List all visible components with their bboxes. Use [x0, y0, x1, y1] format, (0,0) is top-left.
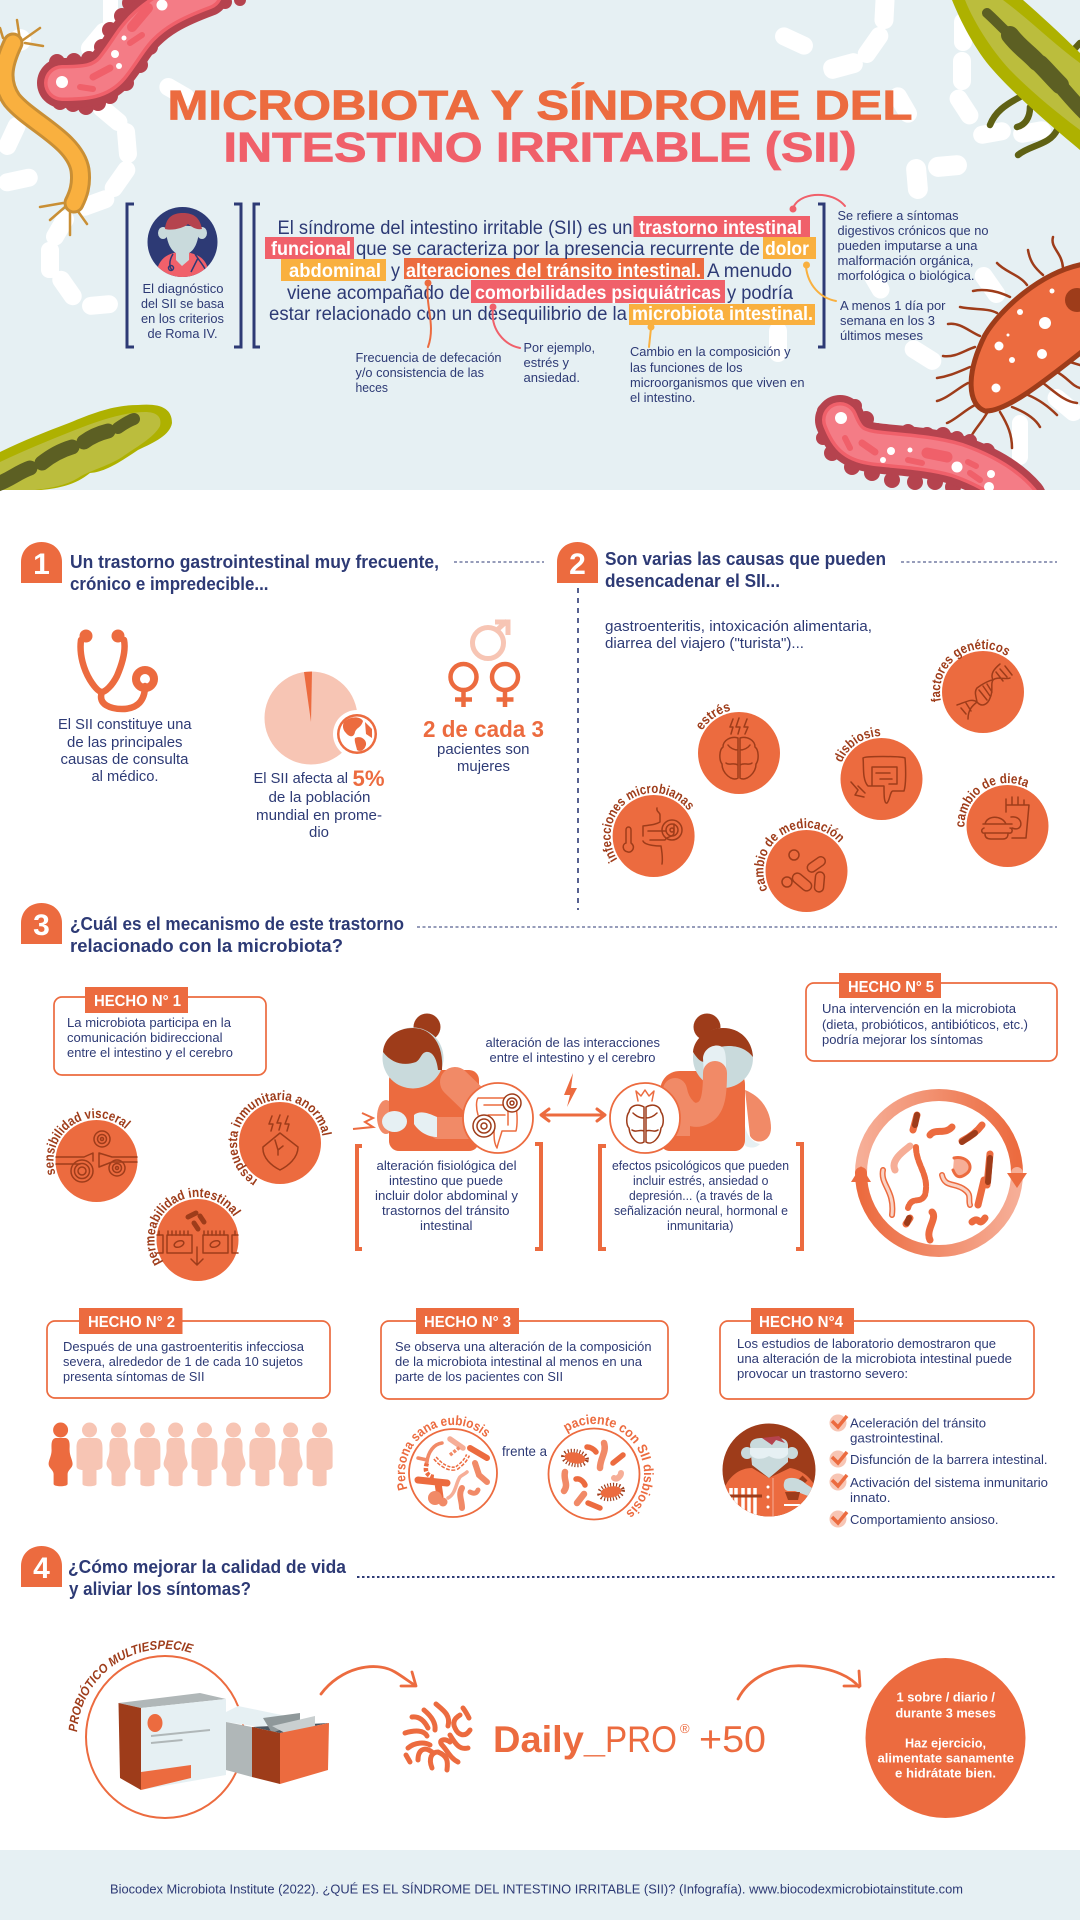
- fact 3 box: parte de los pacientes con SII: [395, 1369, 563, 1384]
- callout: microbiota imbalance: Cambio en la composición y: [630, 344, 791, 359]
- callout connectors: [424, 195, 845, 348]
- circle: healthy eubiosis: [397, 1415, 498, 1518]
- callout: microbiota imbalance: las funciones de los: [630, 360, 743, 375]
- icon: lab scientist: [722, 1424, 816, 1516]
- figure: woman with stress: [660, 1014, 771, 1151]
- section 4 badge: [21, 1546, 62, 1587]
- fact 3 box: de la microbiota intestinal al menos en una: [395, 1354, 643, 1369]
- left note: diagnosis: en los criterios: [141, 311, 224, 326]
- callout: functional definition: morfológica o biológica.: [838, 268, 974, 283]
- fact 5 box: (dieta, probióticos, antibióticos, etc.): [822, 1017, 1028, 1032]
- header background: [0, 0, 1080, 490]
- left note brackets: [127, 204, 241, 347]
- fact 3 box: Se observa una alteración de la composición: [395, 1339, 652, 1354]
- logo: Daily_PRO +50: PRO: [605, 1719, 677, 1760]
- fact 1 box: HECHO N° 1: [94, 993, 181, 1010]
- title: MICROBIOTA Y SÍNDROME DEL: [168, 82, 912, 128]
- text: two of three patients: 2 de cada 3: [423, 716, 544, 742]
- main paragraph with highlights: El síndrome del intestino irritable (SII) es un: [278, 218, 632, 239]
- text: main consultation cause: de las principales: [67, 734, 182, 751]
- main paragraph with highlights: trastorno intestinal: [639, 218, 802, 239]
- callout: functional definition: digestivos crónicos que no: [838, 223, 988, 238]
- fact 5 box: Una intervención en la microbiota: [822, 1001, 1017, 1016]
- panel: psychological effects: [600, 1144, 802, 1249]
- section 3 heading: relacionado con la microbiota?: [70, 936, 343, 956]
- title: INTESTINO IRRITABLE (SII): [224, 124, 857, 170]
- text: 5 percent: El SII afecta al: [254, 770, 348, 787]
- product circle and label: PROBIÓTICO MULTIESPECIE: [68, 1640, 194, 1732]
- cause: stress: estrés: [698, 704, 730, 730]
- circle: patient dysbiosis: paciente con SII disbiosis: [564, 1414, 654, 1517]
- pie chart: 5 percent: [264, 672, 358, 764]
- section 3 heading: ¿Cuál es el mecanismo de este trastorno: [70, 914, 404, 934]
- cause: medication change: cambio de medicación: [754, 818, 844, 892]
- arrow: to dosage: [738, 1666, 860, 1699]
- panel: physiological effects: intestino que puede: [389, 1173, 503, 1188]
- mechanism: visceral sensitivity: sensibilidad visceral: [46, 1108, 132, 1175]
- callout: comorbidities: ansiedad.: [524, 370, 580, 385]
- section 1 heading: [70, 552, 439, 594]
- logo: swirl: [405, 1704, 470, 1770]
- section 2 badge: 2: [569, 548, 586, 581]
- text: causes intro: gastroenteritis, intoxicación alimentaria,: [605, 618, 872, 635]
- callout: microbiota imbalance: el intestino.: [630, 390, 696, 405]
- text: 5 percent: de la población: [268, 789, 370, 806]
- section 2 heading: Son varias las causas que pueden: [605, 549, 886, 569]
- fact 3 box: [381, 1308, 668, 1399]
- text: main consultation cause: al médico.: [92, 768, 158, 785]
- icon: intestine circle: [463, 1083, 533, 1153]
- text: versus: frente a: [502, 1443, 547, 1459]
- fact 5 box: podría mejorar los síntomas: [822, 1032, 983, 1047]
- section 2 heading: desencadenar el SII...: [605, 571, 780, 591]
- main paragraph with highlights: funcional: [271, 239, 351, 260]
- panel: psychological effects: efectos psicológicos que pueden: [612, 1158, 789, 1173]
- fact 1 box: La microbiota participa en la: [67, 1015, 232, 1030]
- fact 2 box: presenta síntomas de SII: [63, 1369, 204, 1384]
- logo: Daily_PRO +50: +50: [699, 1719, 766, 1760]
- fact 5 box: [806, 973, 1057, 1061]
- dosage circle: alimentate sanamente: [878, 1750, 1014, 1766]
- section 3 badge: [21, 903, 62, 944]
- logo: Daily_PRO +50: ®: [680, 1721, 690, 1736]
- text: two of three patients: [423, 716, 544, 775]
- section 4 heading: [68, 1557, 347, 1599]
- cause: genetic factors: [930, 639, 1024, 733]
- text: two of three patients: mujeres: [457, 758, 510, 775]
- circle: healthy eubiosis: Persona sana eubiosis: [397, 1415, 489, 1491]
- icon: product box: [118, 1693, 226, 1790]
- callout: comorbidities: estrés y: [524, 355, 569, 370]
- people row: 1 in 10: [49, 1422, 333, 1486]
- callout: functional definition: Se refiere a síntomas: [838, 208, 959, 223]
- dosage circle: Haz ejercicio,: [905, 1736, 986, 1750]
- panel: physiological effects: trastornos del tránsito: [382, 1203, 510, 1218]
- callout: frequency: semana en los 3: [840, 313, 935, 328]
- section 2 badge: [557, 542, 598, 583]
- icon: stethoscope: [80, 630, 154, 709]
- checklist: Aceleración del tránsito: [850, 1416, 986, 1430]
- main paragraph with highlights: dolor: [765, 239, 810, 260]
- callout: transit: y/o consistencia de las: [356, 365, 484, 380]
- cause: genetic factors: factores genéticos: [930, 639, 1010, 702]
- main paragraph with highlights: que se caracteriza por la presencia recurrente de: [356, 239, 760, 260]
- text: 5 percent: mundial en prome-: [256, 807, 382, 824]
- bacterium: pink top: [39, 0, 246, 115]
- main paragraph with highlights: y: [391, 261, 400, 282]
- callout: transit: Frecuencia de defecación: [356, 350, 502, 365]
- fact 4 box: provocar un trastorno severo:: [737, 1366, 908, 1381]
- text: causes intro: diarrea del viajero ("turista")...: [605, 635, 804, 652]
- text: altered interactions: entre el intestino y el cerebro: [490, 1050, 656, 1065]
- main paragraph with highlights: microbiota intestinal.: [632, 304, 813, 325]
- bacterium: orange left: [0, 20, 87, 235]
- text: 5 percent: [254, 766, 384, 841]
- checklist: innato.: [850, 1490, 890, 1505]
- text: main consultation cause: causas de consulta: [60, 751, 189, 768]
- text: main consultation cause: [58, 716, 192, 785]
- callout: functional definition: malformación orgánica,: [838, 253, 974, 268]
- main paragraph with highlights: viene acompañado de: [287, 283, 470, 304]
- checklist: [830, 1414, 1048, 1528]
- product circle and label: [68, 1640, 244, 1819]
- footer band: [0, 1850, 1080, 1920]
- cause: diet change: [957, 773, 1048, 867]
- section 1 badge: 1: [33, 548, 50, 581]
- left note: diagnosis: de Roma IV.: [148, 326, 218, 341]
- panel: psychological effects: depresión... (a través de la: [629, 1188, 773, 1203]
- fact 2 box: [47, 1308, 330, 1398]
- bacterium: orange right: [937, 237, 1080, 448]
- icon: gender symbols: [450, 621, 518, 707]
- background white bacteria pattern: [0, 0, 1080, 465]
- main paragraph with highlights: abdominal: [289, 261, 381, 282]
- callout: frequency: últimos meses: [840, 328, 923, 343]
- section 1 heading: Un trastorno gastrointestinal muy frecuente,: [70, 552, 439, 572]
- callout: comorbidities: [524, 340, 595, 385]
- text: altered interactions: [486, 1035, 660, 1065]
- main paragraph with highlights: estar relacionado con un desequilibrio de la: [269, 304, 627, 325]
- fact 2 box: severa, alrededor de 1 de cada 10 sujetos: [63, 1354, 303, 1369]
- icon: brain circle: [610, 1083, 680, 1153]
- main paragraph with highlights: alteraciones del tránsito intestinal.: [406, 261, 701, 282]
- callout: functional definition: pueden imputarse a una: [838, 238, 978, 253]
- fact 1 box: comunicación bidireccional: [67, 1030, 223, 1045]
- mechanism: intestinal permeability: permeabilidad intestinal: [147, 1188, 242, 1266]
- arrow: bidirectional: [541, 1109, 605, 1121]
- section 3 badge: 3: [33, 909, 50, 942]
- panel: physiological effects: alteración fisiológica del: [376, 1158, 517, 1173]
- icon: lightning: [564, 1073, 577, 1107]
- callout: microbiota imbalance: microorganismos que viven en: [630, 375, 804, 390]
- main paragraph with highlights: [265, 216, 816, 325]
- fact 4 box: Los estudios de laboratorio demostraron que: [737, 1336, 996, 1351]
- cause: dysbiosis: [834, 727, 922, 820]
- fact 1 box: [54, 987, 266, 1075]
- main paragraph with highlights: A menudo: [707, 261, 792, 282]
- figure: woman with abdominal pain: [353, 1014, 482, 1151]
- cause: dysbiosis: disbiosis: [834, 727, 880, 762]
- section 4 heading: y aliviar los síntomas?: [69, 1579, 251, 1599]
- checklist: Disfunción de la barrera intestinal.: [850, 1452, 1048, 1467]
- icon: open box with sachets: [226, 1706, 329, 1784]
- callout: functional definition: [838, 208, 988, 283]
- bacterium: green top right: [952, 0, 1080, 155]
- section 1 heading: crónico e impredecible...: [70, 574, 268, 594]
- section 4 heading: ¿Cómo mejorar la calidad de vida: [68, 1557, 347, 1577]
- fact 4 box: HECHO N°4: [759, 1314, 843, 1331]
- panel: psychological effects: señalización neural, hormonal e: [614, 1203, 788, 1218]
- mechanism: visceral sensitivity: [46, 1108, 138, 1202]
- main paragraph with highlights: y podría: [727, 283, 793, 304]
- dosage circle: durante 3 meses: [896, 1706, 996, 1720]
- main paragraph brackets: [254, 204, 824, 347]
- callout: transit: [356, 350, 502, 395]
- arrow: to product: [321, 1667, 416, 1694]
- bacterium: green bottom left: [0, 405, 172, 490]
- callout: comorbidities: Por ejemplo,: [524, 340, 595, 355]
- cause: diet change: cambio de dieta: [957, 773, 1028, 827]
- panel: physiological effects: [357, 1144, 541, 1249]
- bacterium: pink bottom right: [816, 396, 1031, 500]
- icon: microbiota intervention circle: [851, 1095, 1027, 1251]
- left note: diagnosis: El diagnóstico: [142, 281, 224, 296]
- icon: globe: [333, 710, 381, 758]
- section 2 heading: [605, 549, 886, 591]
- section 1 badge: [21, 542, 62, 583]
- callout: frequency: [840, 298, 946, 343]
- text: altered interactions: alteración de las interacciones: [486, 1035, 660, 1050]
- panel: physiological effects: incluir dolor abdominal y: [375, 1188, 519, 1203]
- dosage circle: e hidrátate bien.: [895, 1766, 996, 1780]
- cause: stress: [698, 704, 780, 794]
- panel: psychological effects: inmunitaria): [667, 1218, 734, 1233]
- callout: microbiota imbalance: [630, 344, 804, 405]
- dosage circle: [866, 1658, 1026, 1818]
- fact 1 box: entre el intestino y el cerebro: [67, 1045, 233, 1060]
- checklist: gastrointestinal.: [850, 1430, 944, 1446]
- fact 2 box: HECHO N° 2: [88, 1314, 175, 1331]
- checklist: Activación del sistema inmunitario: [850, 1475, 1048, 1490]
- panel: psychological effects: incluir estrés, ansiedad o: [633, 1173, 768, 1188]
- cause: microbial infections: infecciones microbianas: [602, 784, 693, 864]
- text: causes intro: [605, 618, 872, 652]
- text: main consultation cause: El SII constituye una: [58, 716, 192, 733]
- callout: frequency: A menos 1 día por: [840, 298, 946, 313]
- main paragraph with highlights: comorbilidades psiquiátricas: [475, 283, 721, 304]
- text: 5 percent: dio: [309, 824, 329, 841]
- text: two of three patients: pacientes son: [437, 741, 530, 758]
- callout: transit: heces: [356, 380, 388, 395]
- title: [168, 82, 912, 170]
- text: 5 percent: 5%: [352, 766, 384, 791]
- footer citation: Biocodex Microbiota Institute (2022). ¿QUÉ ES EL SÍNDROME DEL INTESTINO IRRITABLE (SII)? (Infografía). www.biocodexmicrobiotainstitute.com: [110, 1882, 963, 1896]
- fact 4 box: [720, 1308, 1034, 1399]
- fact 2 box: Después de una gastroenteritis infecciosa: [63, 1339, 305, 1354]
- fact 5 box: HECHO N° 5: [848, 979, 934, 996]
- left note: diagnosis: [141, 281, 225, 341]
- logo: Daily_PRO +50: Daily_: [493, 1719, 605, 1760]
- icon: doctor: [148, 207, 218, 277]
- fact 4 box: una alteración de la microbiota intestinal puede: [737, 1351, 1012, 1366]
- panel: physiological effects: intestinal: [420, 1218, 473, 1233]
- left note: diagnosis: del SII se basa: [141, 296, 225, 311]
- section 4 badge: 4: [33, 1552, 50, 1585]
- dosage circle: 1 sobre / diario /: [896, 1690, 995, 1704]
- checklist: Comportamiento ansioso.: [850, 1512, 998, 1527]
- logo: Daily_PRO +50: [493, 1719, 766, 1760]
- section 3 heading: [70, 914, 404, 956]
- mechanism: abnormal immune response: respuesta inmunitaria anormal: [228, 1090, 332, 1186]
- fact 3 box: HECHO N° 3: [424, 1314, 511, 1331]
